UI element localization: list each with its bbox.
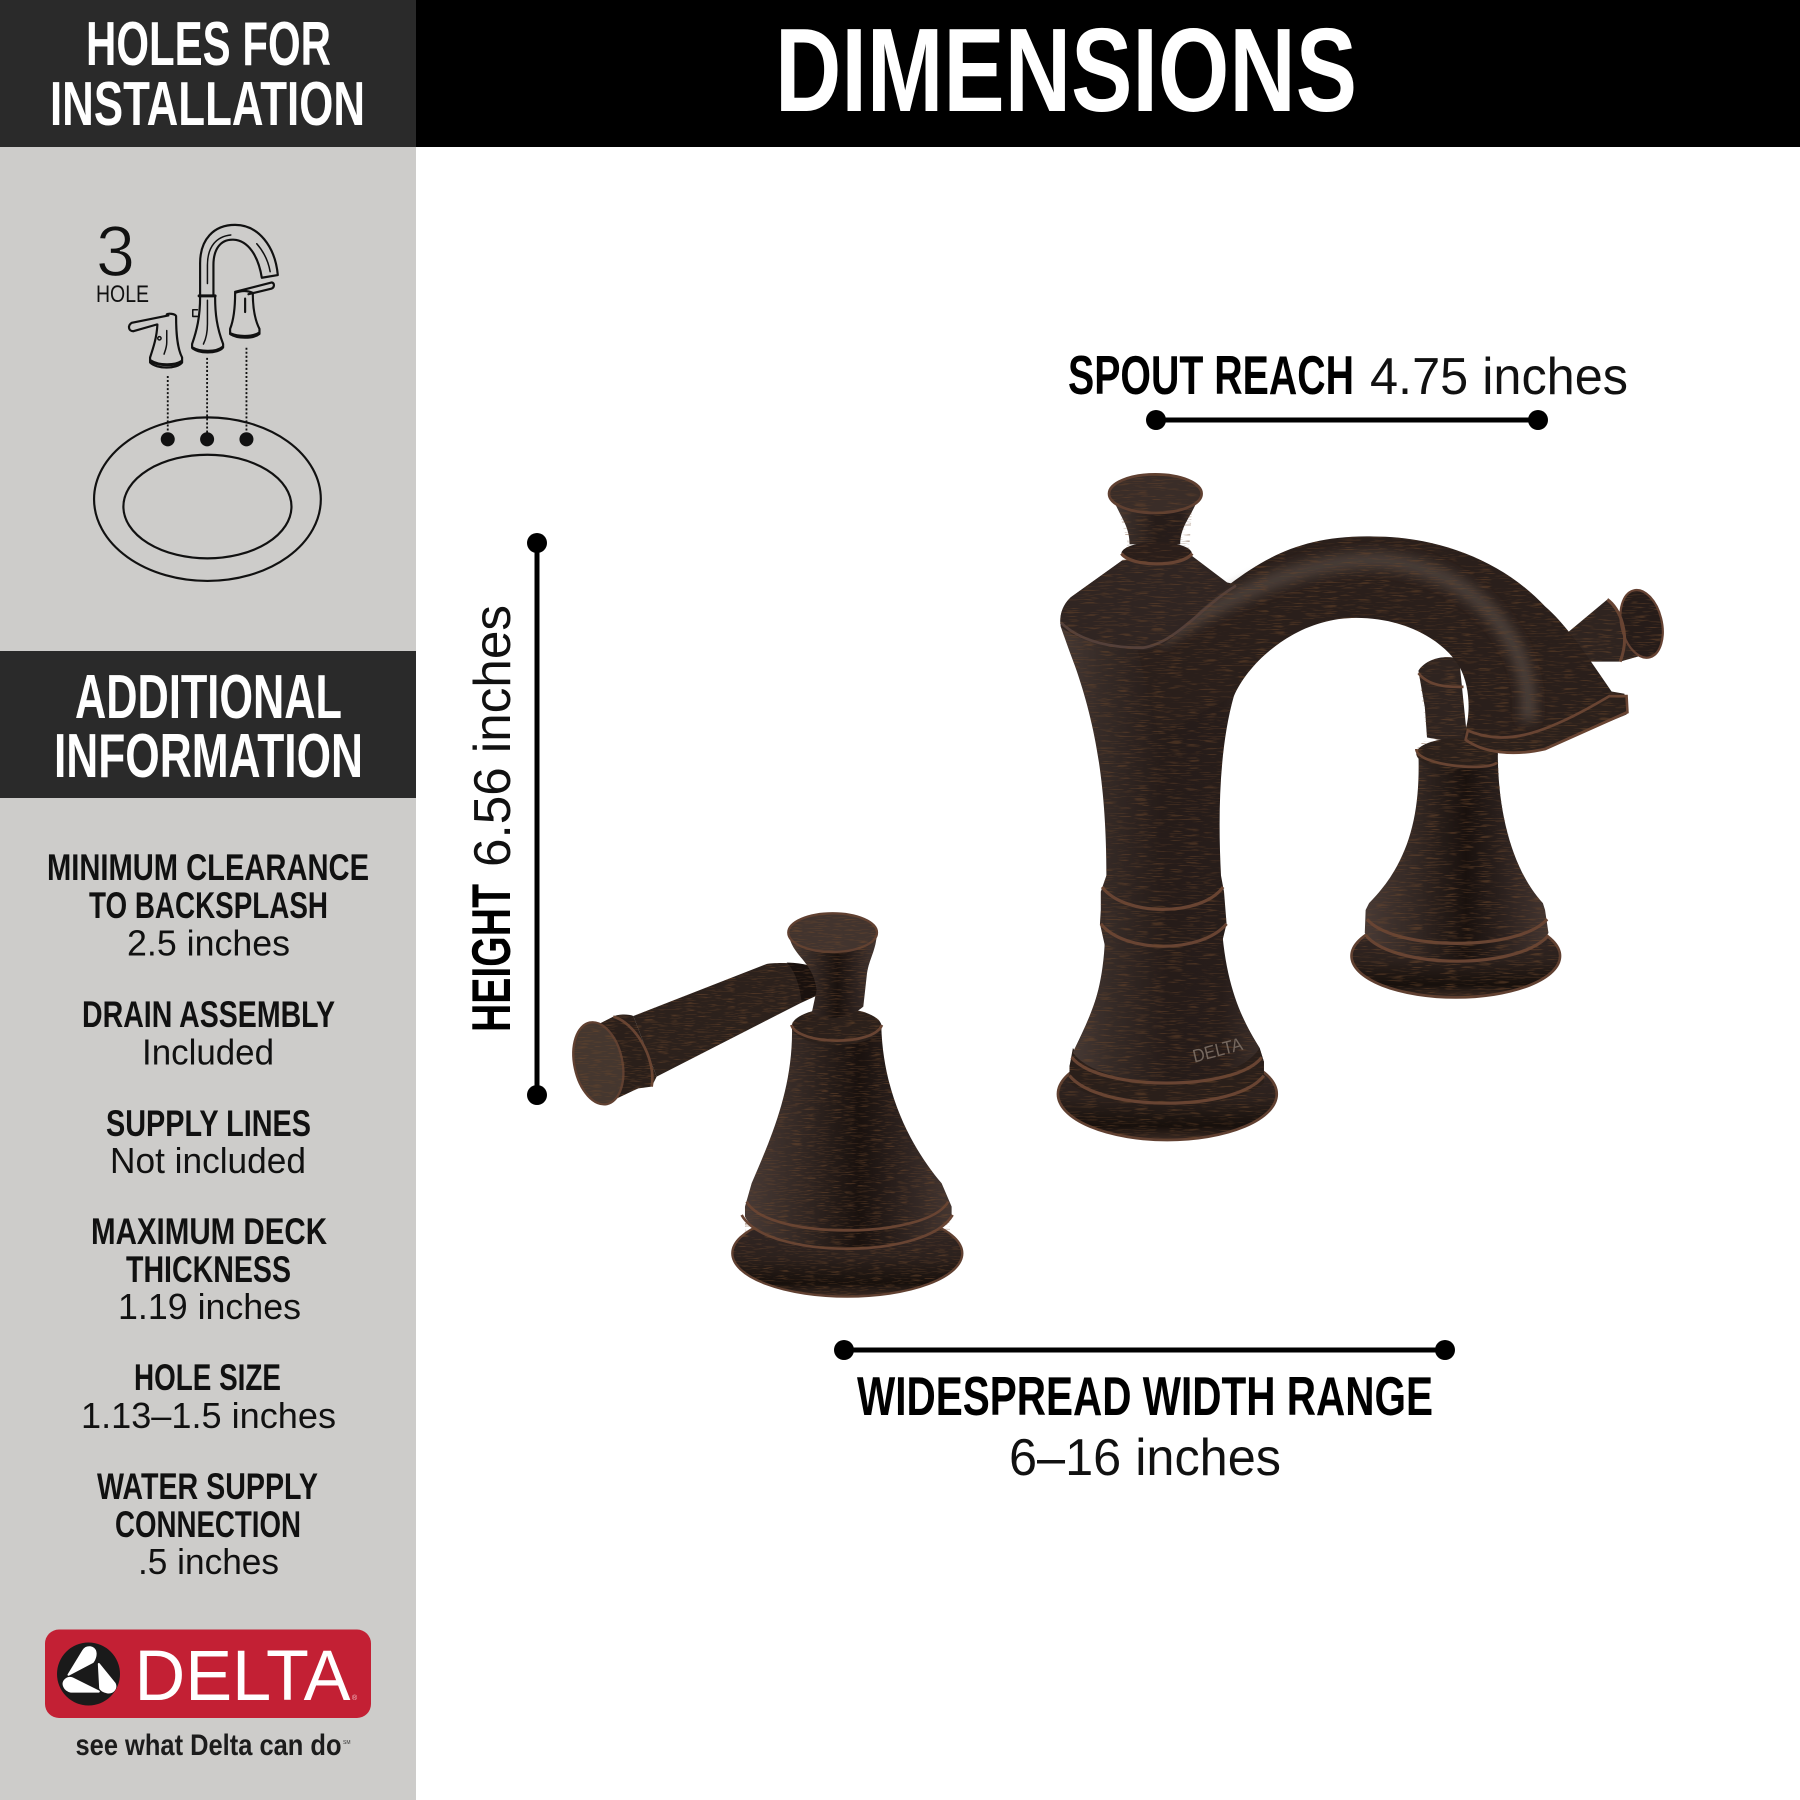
dimension: spout reach: 4.75 inches [1370,348,1628,406]
dimension: spout reach: SPOUT REACH [1068,344,1354,406]
title bar: dimensions [416,0,1800,147]
spec: hole size [81,1357,336,1436]
spec: hole size: 1.13–1.5 inches [81,1395,336,1436]
tagline: SM [343,1740,350,1746]
brushed texture on near handle [570,907,970,1300]
engraved brand mark: DELTA [1191,1034,1245,1067]
dimension: spout reach [1068,344,1628,430]
spec: water supply connection: WATER SUPPLY [97,1466,318,1507]
dimension: widespread width range: WIDESPREAD WIDTH RANGE [857,1365,1433,1427]
spec: maximum deck thickness: 1.19 inches [118,1286,301,1327]
spec: minimum clearance: MINIMUM CLEARANCE [47,847,369,888]
heading: holes for installation: INSTALLATION [50,70,365,139]
spec: supply lines [106,1103,311,1181]
title bar: dimensions: DIMENSIONS [775,4,1357,137]
lever arm [566,963,823,1109]
logo: delta: DELTA [134,1637,351,1716]
spec: water supply connection: CONNECTION [115,1504,301,1545]
far handle [1351,585,1669,997]
brushed texture on body [1047,464,1648,1145]
heading: holes for installation [0,0,416,147]
dimension: height: 6.56 inches [464,605,522,867]
icon: three hole sink diagram [94,213,321,581]
bell base [732,1008,962,1297]
shoulder top [1060,554,1236,650]
logo: delta: ® [352,1694,358,1702]
sidebar panel [0,147,416,1800]
spec: supply lines: Not included [110,1140,306,1181]
spec: minimum clearance: 2.5 inches [127,922,290,964]
spec: minimum clearance [47,847,369,964]
spout arc [1137,536,1627,754]
spec: maximum deck thickness: MAXIMUM DECK [91,1211,327,1252]
faucet: near handle [566,907,970,1300]
icon: three hole sink diagram: 3 [96,213,135,292]
spec: water supply connection: .5 inches [138,1541,279,1582]
faucet: spout and far handle [1047,464,1674,1145]
handle knob [788,913,877,1018]
spec: water supply connection [97,1466,318,1582]
spec list [47,847,369,1582]
spec: supply lines: SUPPLY LINES [106,1103,311,1144]
dimension: widespread width range [834,1340,1455,1487]
main body [1058,560,1277,1140]
spec: drain assembly: Included [142,1032,274,1072]
dimension: widespread width range: 6–16 inches [1009,1429,1281,1487]
dimension: height [460,533,547,1105]
brushed texture on far handle [1348,588,1674,1002]
spec: minimum clearance: TO BACKSPLASH [89,885,328,926]
spec: drain assembly: DRAIN ASSEMBLY [82,994,335,1035]
heading: holes for installation: HOLES FOR [86,10,331,79]
icon: three hole sink diagram: HOLE [96,281,149,308]
logo: delta [45,1630,371,1718]
tagline: see what Delta can do [76,1729,342,1762]
dimension: height: HEIGHT [460,884,522,1032]
spec: maximum deck thickness [91,1211,327,1327]
heading: additional information: INFORMATION [54,722,363,791]
heading: additional information: ADDITIONAL [75,663,342,732]
heading: additional information [0,651,416,798]
top knob [1109,474,1202,565]
spec: drain assembly [82,994,335,1072]
spec: hole size: HOLE SIZE [134,1357,281,1398]
spec: maximum deck thickness: THICKNESS [126,1249,291,1290]
